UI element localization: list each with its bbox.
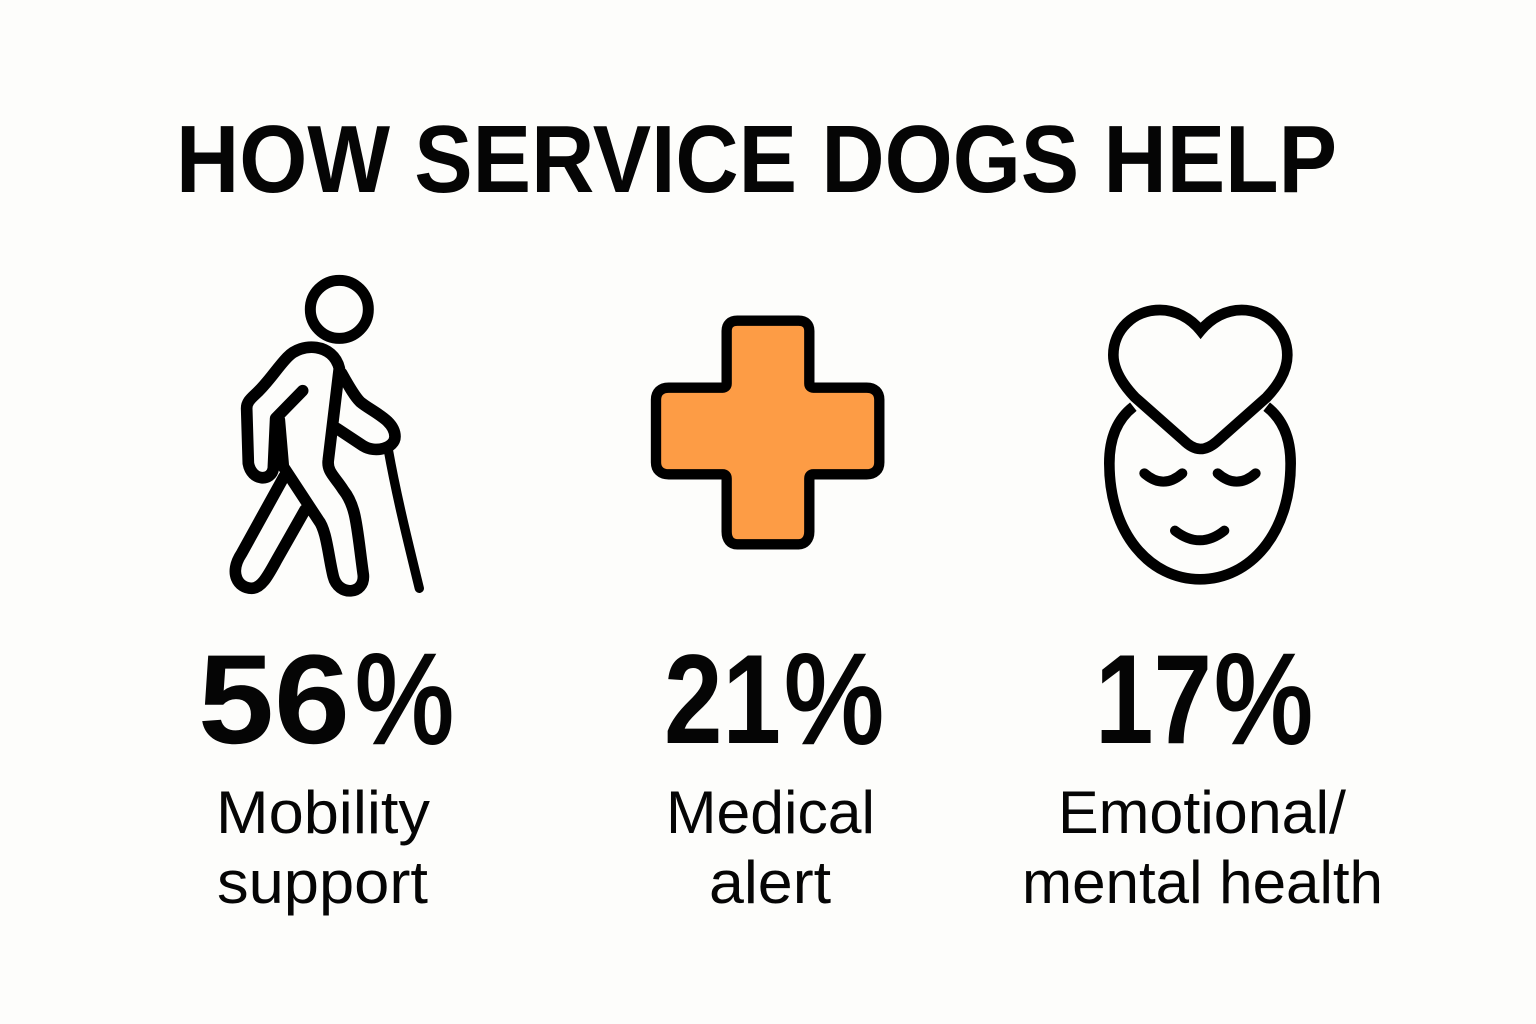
stat: 17%: % [1214, 628, 1313, 770]
stat: 21%: 21 [664, 628, 781, 770]
stat: 56%: % [355, 628, 454, 770]
stat: 56%: 56 [198, 628, 350, 770]
label: mobility support: support [217, 849, 428, 916]
panel: emotional and mental health [1022, 310, 1383, 916]
label: emotional/mental health: Emotional/ [1058, 779, 1346, 846]
panel: mobility support [198, 280, 454, 916]
label: emotional/mental health: mental health [1022, 849, 1383, 916]
stat: 17%: 17 [1095, 628, 1212, 770]
icon: orange medical cross [656, 321, 879, 544]
icon: person walking with cane [235, 280, 419, 591]
label: medical alert: alert [709, 849, 831, 916]
icon: heart over calm face [1109, 310, 1291, 579]
label: medical alert: Medical [666, 779, 875, 846]
stat: 21%: % [784, 628, 884, 770]
title: HOW SERVICE DOGS HELP [176, 106, 1337, 213]
panel: medical alert [656, 321, 884, 916]
label: mobility support: Mobility [216, 779, 430, 846]
